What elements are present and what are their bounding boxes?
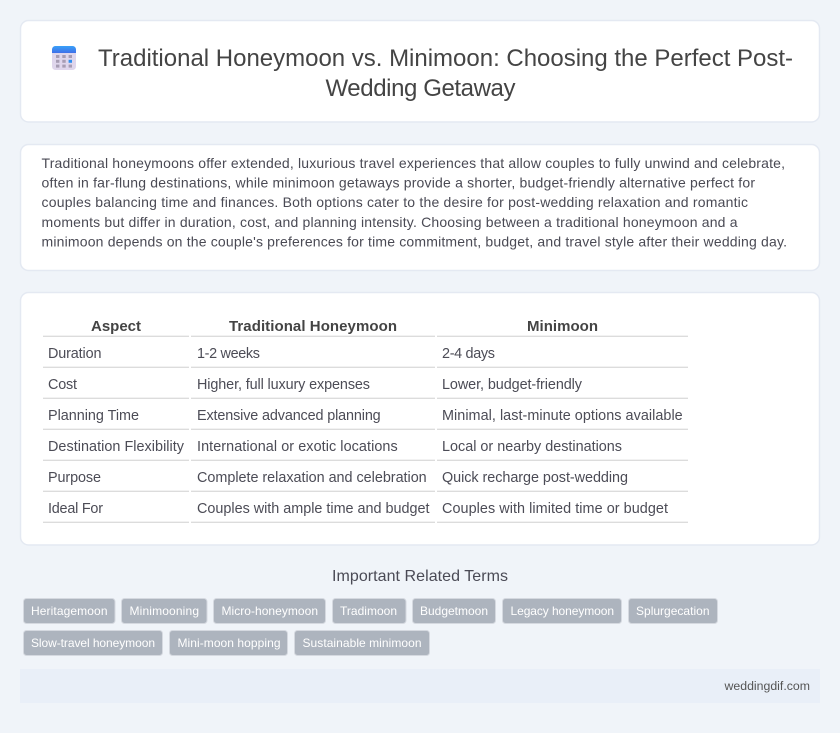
text block: introduction	[42, 155, 787, 249]
panel: comparison table	[20, 292, 820, 545]
row: purpose: Quick recharge post-wedding	[442, 470, 628, 486]
row: duration	[48, 346, 495, 362]
tag: Legacy honeymoon: Legacy honeymoon	[510, 604, 614, 618]
tag: Sustainable minimoon: Sustainable minimoon	[302, 636, 422, 650]
row: ideal for: Couples with ample time and budget	[197, 501, 430, 517]
title: Wedding Getaway	[326, 75, 516, 102]
tag: Mini-moon hopping	[170, 630, 288, 656]
tag: Mini-moon hopping: Mini-moon hopping	[178, 636, 280, 650]
footer source text: weddingdif.com	[724, 679, 810, 693]
tag: Budgetmoon	[412, 598, 496, 624]
footer	[20, 669, 820, 703]
row: destination flexibility: International or exotic locations	[197, 439, 398, 455]
tag: Slow-travel honeymoon: Slow-travel honeymoon	[31, 636, 155, 650]
row: cost: Higher, full luxury expenses	[197, 377, 370, 393]
row: duration: 2-4 days	[442, 346, 495, 362]
tag: Sustainable minimoon	[294, 630, 430, 656]
row: purpose: Purpose	[48, 470, 101, 486]
tag: Splurgecation	[628, 598, 718, 624]
tag: Budgetmoon: Budgetmoon	[420, 604, 488, 618]
row: ideal for: Couples with limited time or budget	[442, 501, 668, 517]
row: ideal for	[48, 501, 668, 517]
row: destination flexibility: Destination Flexibility	[48, 439, 185, 455]
table header: Traditional Honeymoon	[229, 318, 397, 335]
text block: introduction: often in far-flung destinations, while minimoon getaways provide a shorter, budget-friendly alternative perfect for	[42, 175, 755, 191]
row: cost	[48, 377, 583, 393]
row: planning time: Extensive advanced planning	[197, 408, 381, 424]
row: destination flexibility: Local or nearby destinations	[442, 439, 622, 455]
tag: Slow-travel honeymoon	[24, 630, 162, 656]
row: planning time: Minimal, last-minute options available	[442, 408, 683, 424]
row: ideal for: Ideal For	[48, 501, 103, 517]
tag: Micro-honeymoon: Micro-honeymoon	[222, 604, 318, 618]
row: cost: Lower, budget-friendly	[442, 377, 583, 393]
panel: header	[20, 20, 820, 122]
row: purpose	[48, 470, 628, 486]
tag: Micro-honeymoon	[214, 598, 326, 624]
table header	[91, 318, 598, 335]
tag: Splurgecation: Splurgecation	[636, 604, 710, 618]
row: destination flexibility	[48, 439, 622, 455]
title: Traditional Honeymoon vs. Minimoon: Choosing the Perfect Post-	[98, 45, 793, 72]
tag: Minimooning	[122, 598, 207, 624]
row: cost: Cost	[48, 377, 77, 393]
tag: Tradimoon	[332, 598, 406, 624]
text block: introduction: minimoon depends on the couple's preferences for time commitment, budget, and travel style after their wedding day.	[42, 233, 787, 249]
row: duration: Duration	[48, 346, 102, 362]
icon: calendar	[52, 46, 76, 70]
row: planning time	[48, 408, 683, 424]
row: planning time: Planning Time	[48, 408, 139, 424]
panel: introduction text	[20, 144, 820, 270]
tag: Minimooning: Minimooning	[130, 604, 199, 618]
heading: important related terms: Important Related Terms	[332, 568, 508, 585]
text block: introduction: couples balancing time and finances. Both options cater to the desire for post-wedding relaxation and romantic	[42, 194, 748, 210]
tag: Heritagemoon: Heritagemoon	[31, 604, 108, 618]
table header: Aspect	[91, 318, 141, 335]
title	[98, 45, 793, 102]
tag: Tradimoon: Tradimoon	[340, 604, 397, 618]
row: duration: 1-2 weeks	[197, 346, 260, 362]
row: purpose: Complete relaxation and celebration	[197, 470, 427, 486]
tags: related terms	[24, 598, 718, 656]
tag: Legacy honeymoon	[502, 598, 622, 624]
table header: Minimoon	[527, 318, 598, 335]
tag: Heritagemoon	[24, 598, 115, 624]
text block: introduction: Traditional honeymoons offer extended, luxurious travel experiences that allow couples to fully unwind and celebrate,	[42, 155, 785, 171]
text block: introduction: moments but differ in duration, cost, and planning intensity. Choosing between a traditional honeymoon and a	[42, 214, 738, 230]
